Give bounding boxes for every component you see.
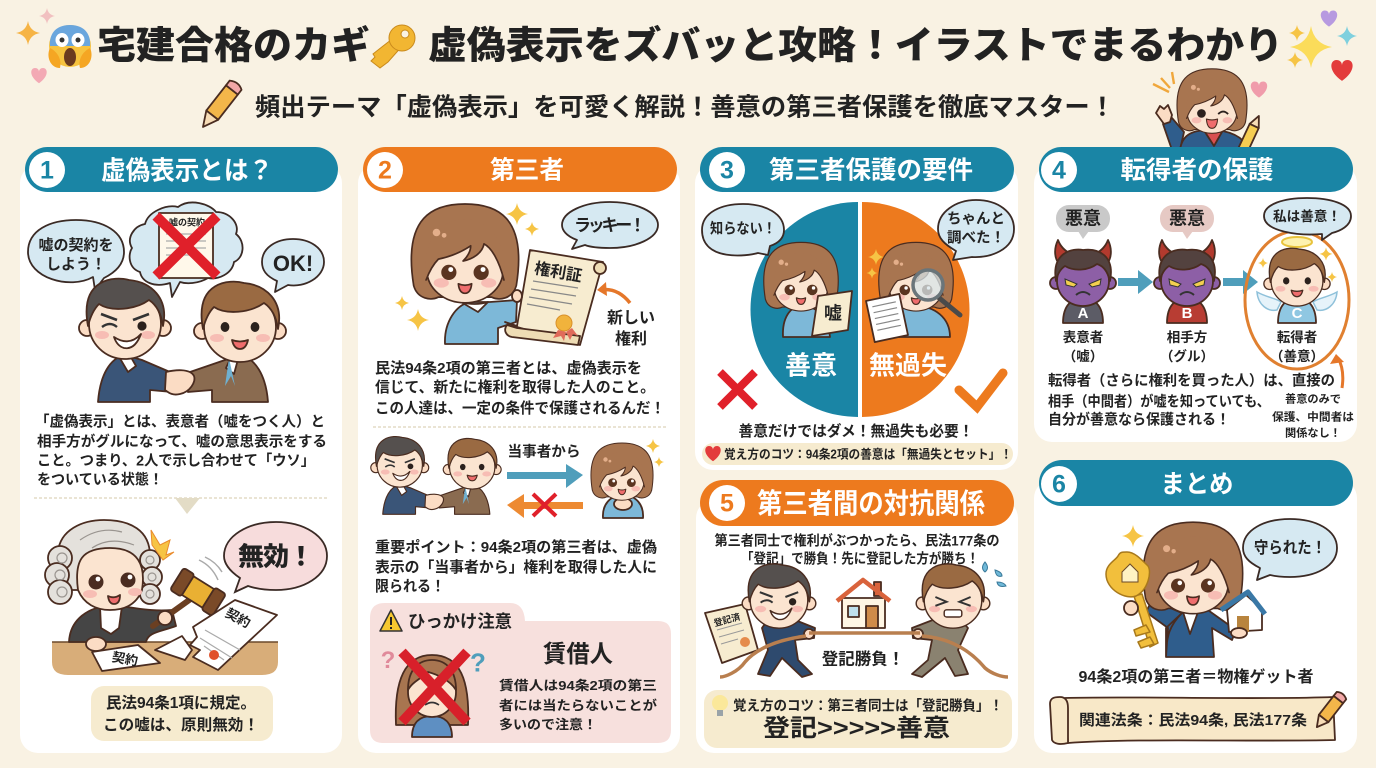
torn papers: [92, 645, 160, 671]
caution box: 多いので注意！: [499, 717, 597, 732]
note: 民法94条1項: 民法94条1項に規定。: [106, 693, 256, 712]
illustration: handshake: [79, 279, 286, 402]
note: 民法94条1項: [91, 686, 273, 741]
wig: [45, 520, 162, 604]
panel 4: 転得者の保護: [1034, 147, 1357, 442]
tip box 5: [704, 690, 1012, 748]
speech bubble: 知らない: [702, 204, 784, 255]
person C: [1245, 231, 1349, 369]
icon: girl crossed out: [381, 647, 486, 737]
header 1: 虚偽表示とは？: [101, 156, 273, 186]
illustration: judge: 契約: [223, 605, 253, 631]
person C: C: [1292, 305, 1303, 322]
illustration: judge: [45, 520, 278, 675]
person B: B: [1182, 305, 1193, 322]
arrow B to C: [1223, 270, 1258, 294]
note: 民法94条1項: この嘘は、原則無効！: [103, 716, 259, 734]
body text 4: 自分が善意なら保護される！: [1048, 410, 1230, 428]
icon: screaming face: [48, 25, 92, 68]
speech bubble: 嘘の契約をしよう: [28, 220, 124, 290]
person A: A: [1078, 305, 1089, 322]
text 5: 第三者同士で権利がぶつかったら、民法177条の: [714, 532, 1000, 548]
illustration: tug of war right man: [912, 562, 1006, 677]
caution box: 者には当たらないことが: [499, 698, 657, 713]
icon: cross: [720, 372, 755, 407]
body text 4: [1048, 372, 1335, 428]
title: [16, 8, 1357, 83]
arrow and label: 新しい権利: 新しい: [607, 309, 655, 327]
body text 4: 相手（中間者）が嘘を知っていても、: [1048, 392, 1270, 410]
chart: half circles: [750, 202, 969, 417]
illustration: scroll: [705, 604, 758, 663]
header 2: [363, 147, 677, 192]
speech bubble: ラッキー: [562, 202, 658, 249]
body text 2: 信じて、新たに権利を取得した人のこと。: [375, 378, 655, 396]
speech bubble: 守られた: 守られた！: [1254, 539, 1326, 557]
speech bubble: 守られた: [1243, 519, 1337, 580]
mascot girl waving: [1153, 69, 1267, 152]
body text important point: [375, 538, 657, 595]
icon: sparkles and hearts right: [1287, 10, 1357, 81]
person A: [1050, 205, 1116, 364]
panel 5: 第三者間の対抗関係: [696, 480, 1018, 753]
caution box: 賃借人: [543, 641, 613, 668]
speech bubble: ちゃんと調べた: [938, 200, 1014, 260]
speech bubble: 知らない: 知らない！: [710, 220, 776, 238]
key: [1106, 552, 1158, 648]
icon: key: [371, 25, 415, 68]
speech bubble: ラッキー: ラッキー！: [574, 216, 646, 235]
panel 3: 第三者保護の要件: [695, 147, 1018, 470]
tip box 5: 登記>>>>>善意: [763, 715, 950, 742]
body text 1: 相手方がグルになって、嘘の意思表示をする: [37, 432, 327, 450]
person C: （善意）: [1270, 348, 1324, 364]
title text part 1: 宅建合格のカギ: [97, 26, 370, 68]
tip box 5: 覚え方のコツ：第三者同士は「登記勝負」！: [733, 698, 1003, 714]
illustration: judge: 契約: [111, 649, 139, 669]
text 5: [714, 532, 1000, 566]
speech bubble: 私は善意: [1264, 198, 1351, 240]
thought cloud: crossed-out contract: 嘘の契約: [169, 216, 205, 228]
arrow A to B: [1118, 270, 1153, 294]
icon: check: [959, 373, 1003, 407]
header 2: 2: [378, 156, 392, 184]
body text 2: 民法94条2項の第三者とは、虚偽表示を: [375, 359, 642, 377]
header 5: 第三者間の対抗関係: [757, 488, 985, 519]
illustration: house: [837, 580, 890, 628]
text 5: 「登記」で勝負！先に登記した方が勝ち！: [741, 550, 979, 566]
body text important point: 限られる！: [375, 578, 445, 595]
label: 登記勝負: 登記勝負！: [822, 650, 904, 668]
body text 2: [375, 359, 665, 417]
illustration: scroll: 登記済: [712, 611, 741, 628]
labels 善意 無過失: 善意: [785, 350, 837, 380]
note: 善意のみで: [1272, 392, 1354, 440]
person A: （嘘）: [1063, 348, 1103, 364]
panel 2: 第三者: [358, 147, 680, 753]
body text important point: 重要ポイント：94条2項の第三者は、虚偽: [375, 538, 657, 556]
person A: 悪意: [1065, 208, 1101, 228]
person A: 表意者: [1063, 329, 1103, 345]
note: 善意のみで: 善意のみで: [1285, 392, 1341, 406]
note: 善意のみで: 関係なし！: [1285, 426, 1341, 440]
girl 善意: 嘘: [824, 304, 842, 324]
spark: [151, 530, 174, 560]
caution box: [370, 603, 671, 743]
note: 善意のみで: 保護、中間者は: [1272, 410, 1354, 424]
header 4: [1039, 147, 1353, 192]
illustration: girl with key and house: [1106, 522, 1265, 657]
icon: bulb: [712, 695, 728, 716]
scroll: 関連法条: 関連法条：民法94条, 民法177条: [1079, 711, 1307, 729]
labels 善意 無過失: 無過失: [869, 350, 947, 380]
header 3: [700, 147, 1014, 192]
icon: girl crossed out: ?: [381, 647, 395, 674]
icon: pencil: [1312, 690, 1347, 731]
header 6: まとめ: [1160, 470, 1234, 498]
person B: 悪意: [1169, 208, 1205, 228]
panel 1: 虚偽表示とは: [20, 147, 342, 753]
subtitle: [197, 79, 1115, 132]
icon: pencil: [197, 79, 243, 132]
body text 1: [35, 412, 327, 488]
speech bubble: ちゃんと調べた: ちゃんと: [947, 210, 1005, 228]
header 4: 転得者の保護: [1120, 156, 1274, 184]
header 1: [25, 147, 338, 192]
header 5: [700, 480, 1014, 526]
speech bubble: 嘘の契約をしよう: 嘘の契約を: [38, 236, 114, 254]
person B: 相手方: [1167, 329, 1207, 345]
speech bubble: OK: OK!: [273, 251, 313, 276]
speech bubble: OK: [262, 239, 324, 292]
illustration: girl with certificate: [395, 203, 606, 345]
panel 6: まとめ: [1034, 460, 1357, 753]
header 3: 3: [720, 156, 734, 184]
icon: sparkles and heart left: [16, 8, 55, 83]
header 5: 5: [720, 490, 734, 518]
speech bubble: 無効: [224, 522, 327, 592]
illustration: rope: [720, 633, 1008, 677]
icon: girl crossed out: ?: [470, 648, 486, 678]
arrow: orange up: [1330, 354, 1344, 388]
icon: warning: [380, 610, 402, 631]
arrow: down triangle: [175, 498, 200, 514]
body text 1: こと。つまり、2人で示し合わせて「ウソ」: [37, 452, 315, 470]
tip bar 3: 覚え方のコツ：94条2項の善意は「無過失とセット」！: [724, 446, 1012, 462]
labels 善意 無過失: [785, 350, 947, 380]
arrow and label: 新しい権利: 権利: [615, 329, 647, 348]
text: 94条2項の第三者: 94条2項の第三者＝物権ゲット者: [1078, 667, 1314, 686]
header 6: 6: [1052, 470, 1066, 498]
person C: 転得者: [1277, 329, 1317, 345]
body text 4: 転得者（さらに権利を買った人）は、直接の: [1048, 372, 1335, 390]
person B: [1154, 205, 1220, 364]
body text 1: をついている状態！: [37, 470, 163, 488]
person B: （グル）: [1160, 348, 1214, 364]
gavel: [153, 598, 192, 626]
illustration: girl with certificate: 権利証: [533, 258, 583, 286]
thought cloud: crossed-out contract: [130, 203, 243, 297]
header 1: 1: [40, 156, 54, 184]
speech bubble: 嘘の契約をしよう: しよう！: [46, 256, 106, 273]
scroll: 関連法条: [1050, 690, 1347, 744]
caution box: 賃借人は94条2項の第三: [499, 678, 657, 693]
illustration: handshake small: [371, 437, 501, 514]
title text part 2: 虚偽表示をズバッと攻略！イラストでまるわかり: [428, 24, 1283, 68]
text: 善意だけではダメ: 善意だけではダメ！無過失も必要！: [738, 422, 974, 440]
body text 1: 「虚偽表示」とは、表意者（嘘をつく人）と: [35, 412, 325, 430]
girl 無過失: [866, 242, 960, 342]
body text 2: この人達は、一定の条件で保護されるんだ！: [375, 399, 665, 417]
speech bubble: 私は善意: 私は善意！: [1273, 208, 1341, 224]
subtitle text: 頻出テーマ「虚偽表示」を可愛く解説！善意の第三者保護を徹底マスター！: [255, 94, 1115, 122]
girl 善意: [764, 242, 852, 337]
house: [1227, 595, 1262, 632]
illustration: tug of war left man: [742, 564, 816, 677]
header 3: 第三者保護の要件: [769, 156, 973, 184]
speech bubble: 無効: 無効！: [238, 542, 314, 572]
arrows: 当事者から: 当事者から: [508, 442, 580, 460]
caution box: ひっかけ注意: [408, 612, 512, 632]
header 6: [1039, 460, 1353, 506]
arrow and label: 新しい権利: [597, 282, 655, 348]
desk: [52, 642, 278, 675]
arrows: 当事者から: [507, 442, 583, 518]
illustration: girl small: [591, 439, 664, 518]
tip bar 3: [702, 443, 1013, 465]
speech bubble: ちゃんと調べた: 調べた！: [947, 230, 1005, 246]
header 2: 第三者: [490, 156, 564, 184]
header 4: 4: [1052, 156, 1066, 184]
body text important point: 表示の「当事者から」権利を取得した人に: [375, 558, 657, 576]
